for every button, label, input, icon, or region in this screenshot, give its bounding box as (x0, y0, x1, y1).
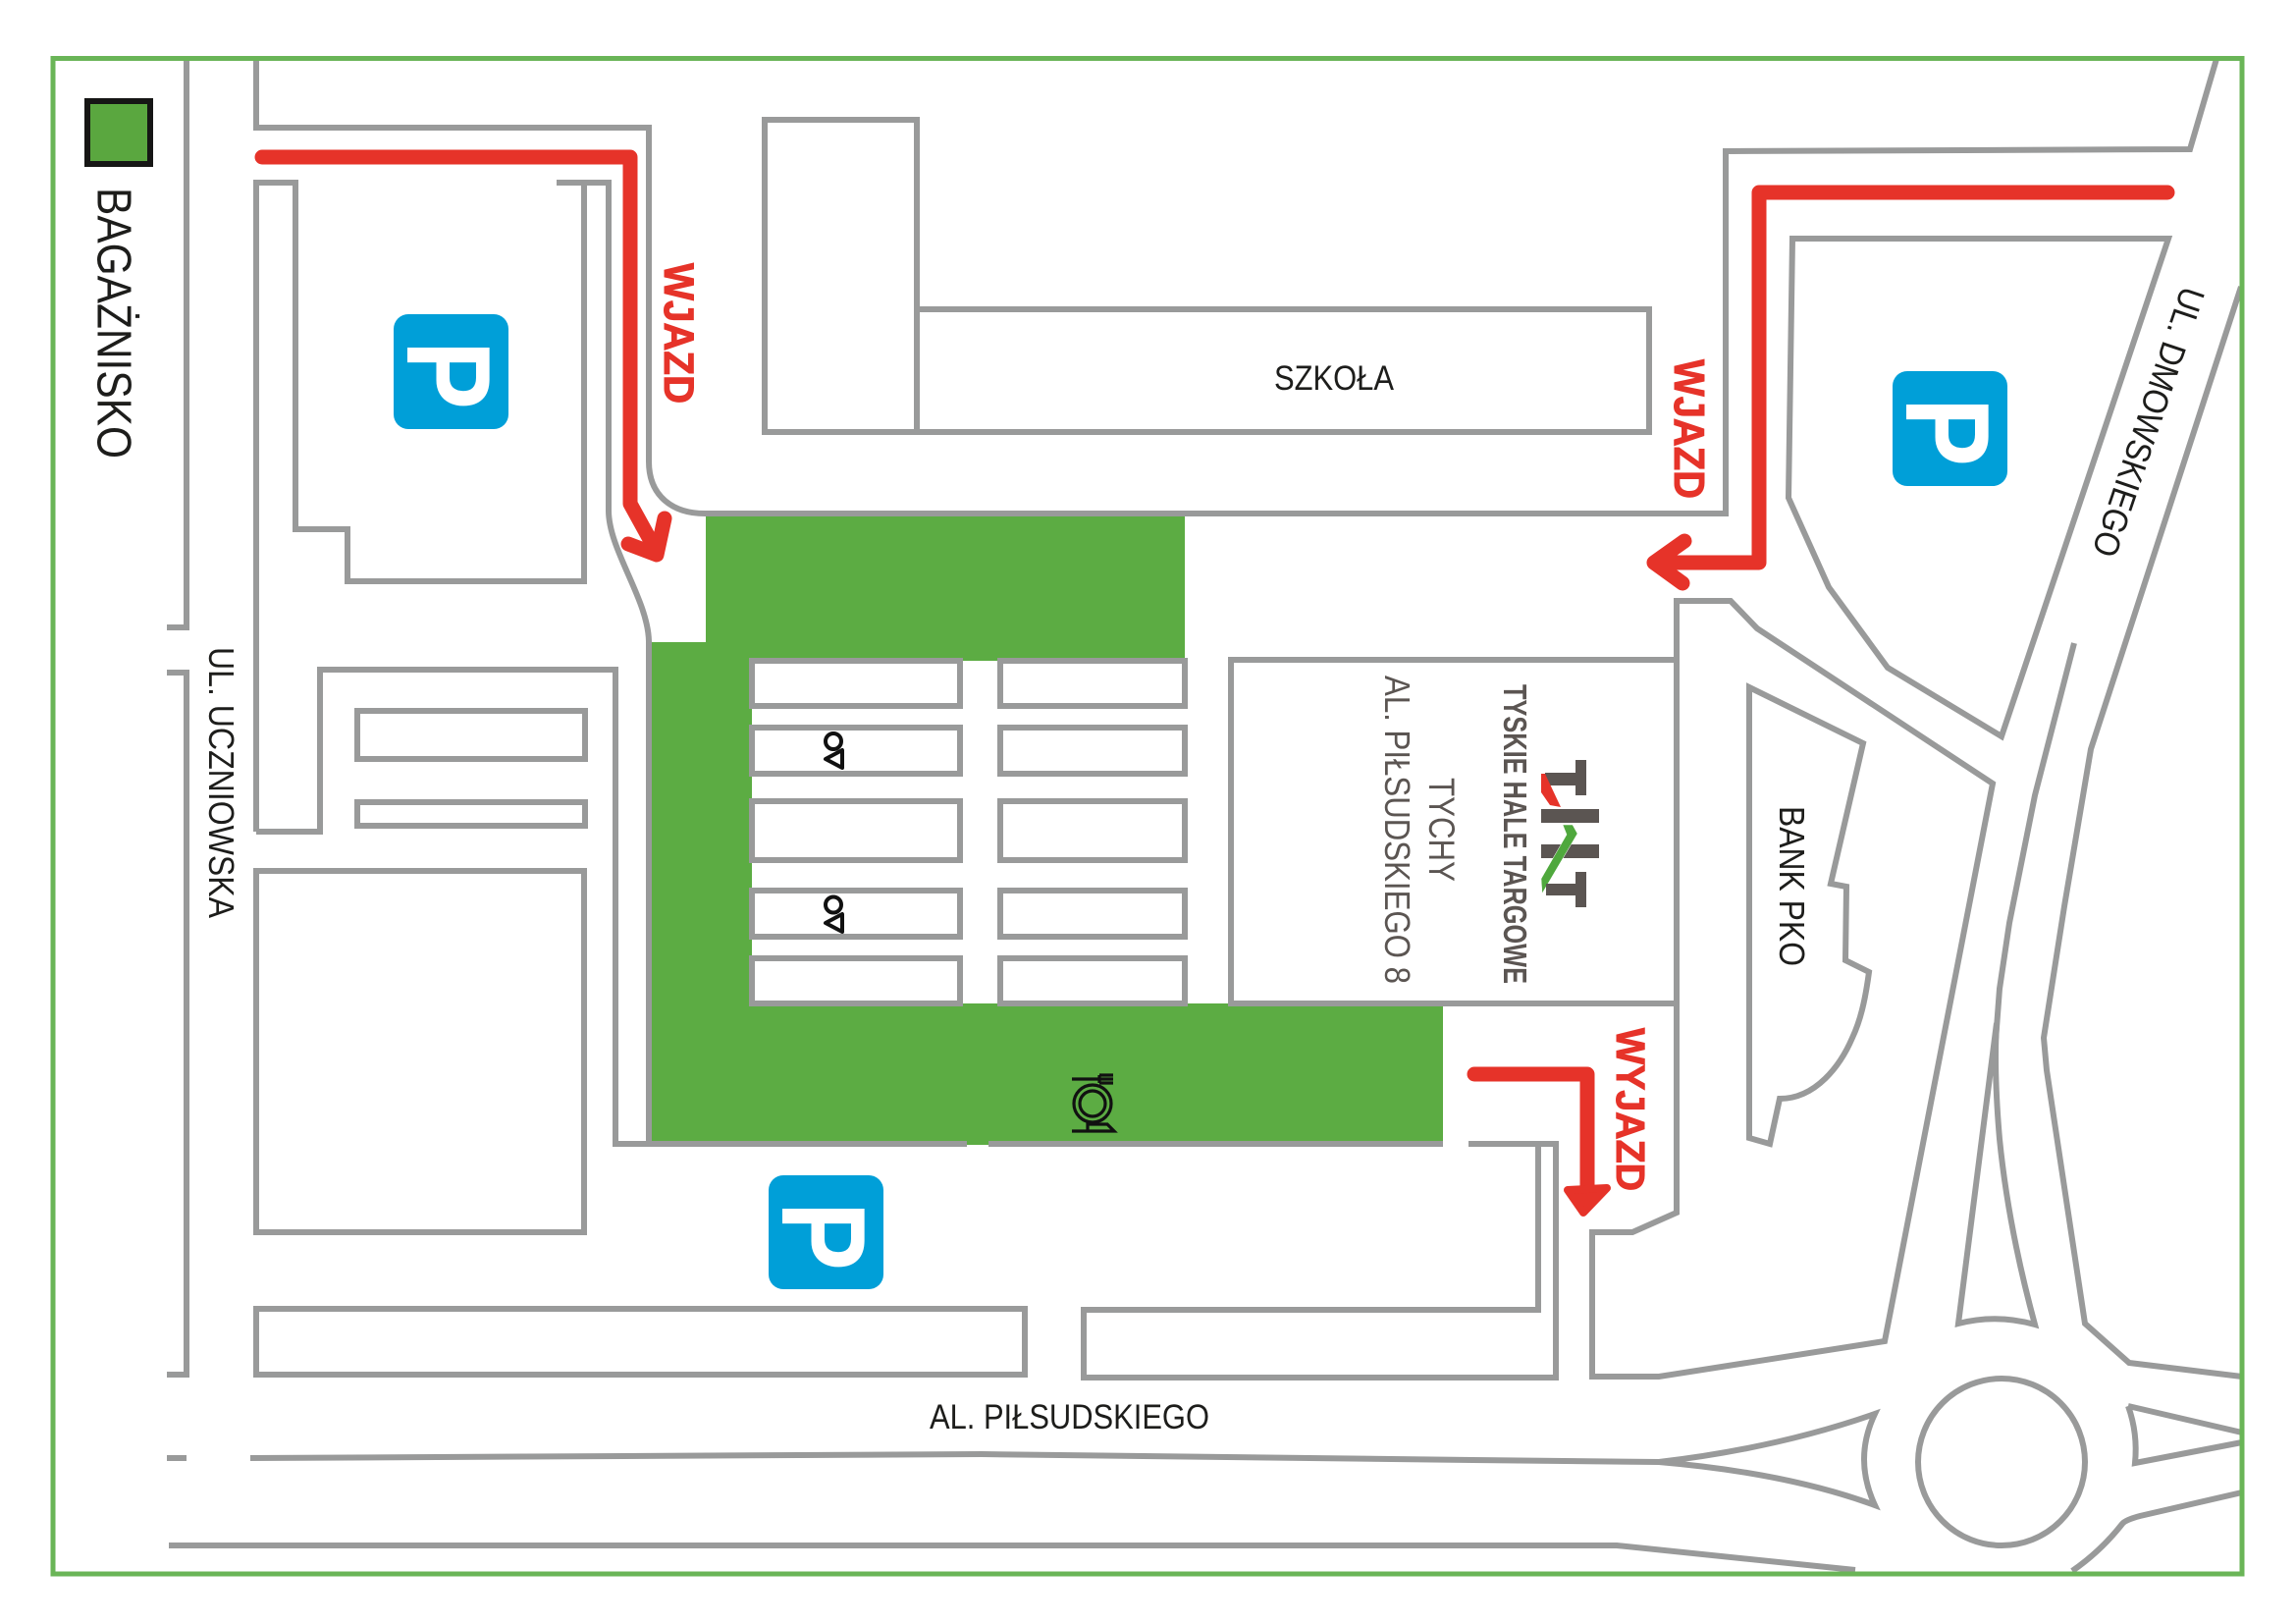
label: east entrance: WJAZD (1665, 359, 1713, 499)
parking sign: north-west: P (381, 341, 514, 409)
stall left 2 (752, 728, 960, 774)
parking sign: north-east: P (1880, 398, 2013, 466)
building: school main (917, 309, 1649, 432)
block: west small rectangle 1 (357, 711, 585, 759)
building label: bank: BANK PKO (1772, 806, 1812, 966)
block: south strip (256, 1309, 1025, 1375)
stall left 5 (752, 958, 960, 1003)
street label: Uczniowska: UL. UCZNIOWSKA (201, 647, 241, 918)
stall rows (752, 661, 1185, 1003)
parking sign: north-east (1880, 371, 2013, 486)
icon: toilet 2 (826, 897, 842, 932)
parking area: east (1789, 239, 2168, 736)
road: Piłsudskiego centre line with west island (250, 1414, 1875, 1505)
east plot outline (1592, 601, 1993, 1377)
street label: Dmowskiego: UL. DMOWSKIEGO (2084, 283, 2213, 563)
building: market hall (1231, 660, 1677, 1003)
road: upper street edge (256, 59, 2216, 514)
street label: Piłsudskiego: AL. PIŁSUDSKIEGO (930, 1398, 1209, 1436)
legend: baggage swatch (87, 101, 150, 164)
building label: school: SZKOŁA (1274, 359, 1395, 398)
road: Dmowskiego median (1996, 643, 2074, 1041)
stall right 2 (1000, 728, 1185, 774)
arrow: west entrance (262, 157, 665, 555)
icon: plate and cutlery (1072, 1075, 1114, 1131)
parking sign: south (756, 1175, 889, 1289)
island: east triangle (2128, 1406, 2242, 1463)
building: school wing (765, 120, 917, 432)
block: west small rectangle 2 (357, 802, 585, 826)
island: north triangle (1958, 1023, 2035, 1325)
parking sign: north-west (381, 314, 514, 429)
parking block: north-west (256, 183, 1556, 1378)
stall left 4 (752, 891, 960, 937)
stall right 5 (1000, 958, 1185, 1003)
legend label: BAGAŻNISKO (86, 188, 139, 459)
block: west lane (256, 670, 649, 1144)
stall left 1 (752, 661, 960, 706)
hall address: AL. PIŁSUDSKIEGO 8 (1377, 676, 1417, 984)
icon: toilet 1 (826, 733, 842, 768)
hall name: TYSKIE HALE TARGOWE (1497, 684, 1533, 984)
arrow: exit (1474, 1074, 1607, 1213)
block: west large rectangle (256, 871, 584, 1232)
hall city: TYCHY (1421, 778, 1462, 882)
building: bank (1749, 687, 1869, 1144)
road: Dmowskiego east edge (2044, 287, 2242, 1377)
road: left street edge (167, 59, 187, 1458)
roundabout (1918, 1379, 2085, 1545)
stall right 1 (1000, 661, 1185, 706)
label: exit: WYJAZD (1608, 1028, 1653, 1191)
label: west entrance: WJAZD (655, 263, 702, 404)
road: Piłsudskiego south edge (169, 1545, 1855, 1570)
road: south-east edge (2072, 1492, 2242, 1571)
stall right 3 (1000, 801, 1185, 860)
stall right 4 (1000, 891, 1185, 937)
logo: THT (1541, 760, 1599, 907)
stall left 3 (752, 801, 960, 860)
baggage area: green zone (652, 516, 1443, 1145)
parking sign: south: P (756, 1202, 889, 1271)
arrow: east entrance (1654, 192, 2167, 583)
